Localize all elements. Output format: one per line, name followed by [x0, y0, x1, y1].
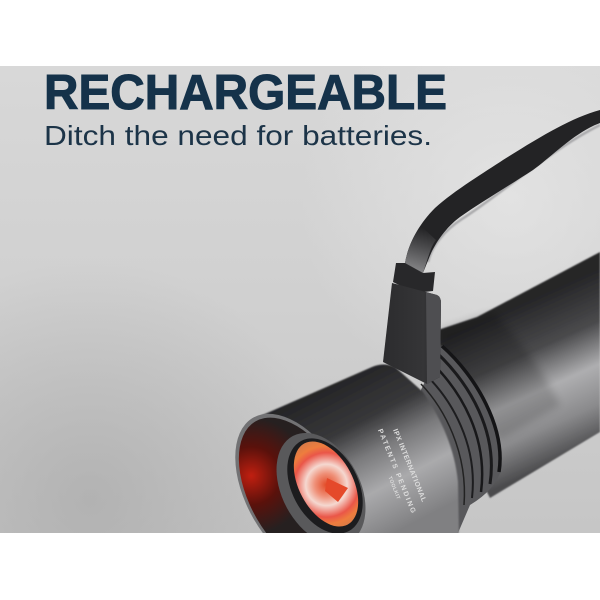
photo panel: flashlight on grey surface [0, 66, 600, 533]
flashlight rear body and neck [438, 252, 600, 498]
plug body [383, 283, 441, 384]
barrel engraved text: PATENTS PENDING [376, 428, 416, 515]
barrel engraved text: IPX INTERNATIONAL [391, 428, 427, 504]
cable light edge [428, 125, 600, 262]
head inner reflector [238, 418, 307, 533]
neck shaded step [438, 312, 560, 440]
cable bend highlight [405, 226, 436, 273]
reflector grey collar [276, 433, 366, 533]
grey surface background [0, 66, 600, 533]
subheading: Ditch the need for batteries. [44, 120, 432, 151]
headline: RECHARGEABLE [44, 66, 447, 120]
cable flat band [405, 110, 600, 273]
lens [294, 442, 358, 526]
USB cable [405, 110, 600, 273]
flashlight head barrel [260, 364, 460, 533]
head front rim [235, 414, 312, 533]
barrel engraved text: TOOLKIT [386, 476, 401, 500]
lens outer ring [287, 438, 363, 533]
infographic canvas [0, 66, 600, 533]
threaded rings [420, 345, 501, 533]
plug strain relief [393, 263, 435, 293]
USB plug [383, 263, 441, 384]
flashlight [235, 251, 600, 533]
plug side face [426, 292, 441, 384]
LED [325, 478, 348, 502]
